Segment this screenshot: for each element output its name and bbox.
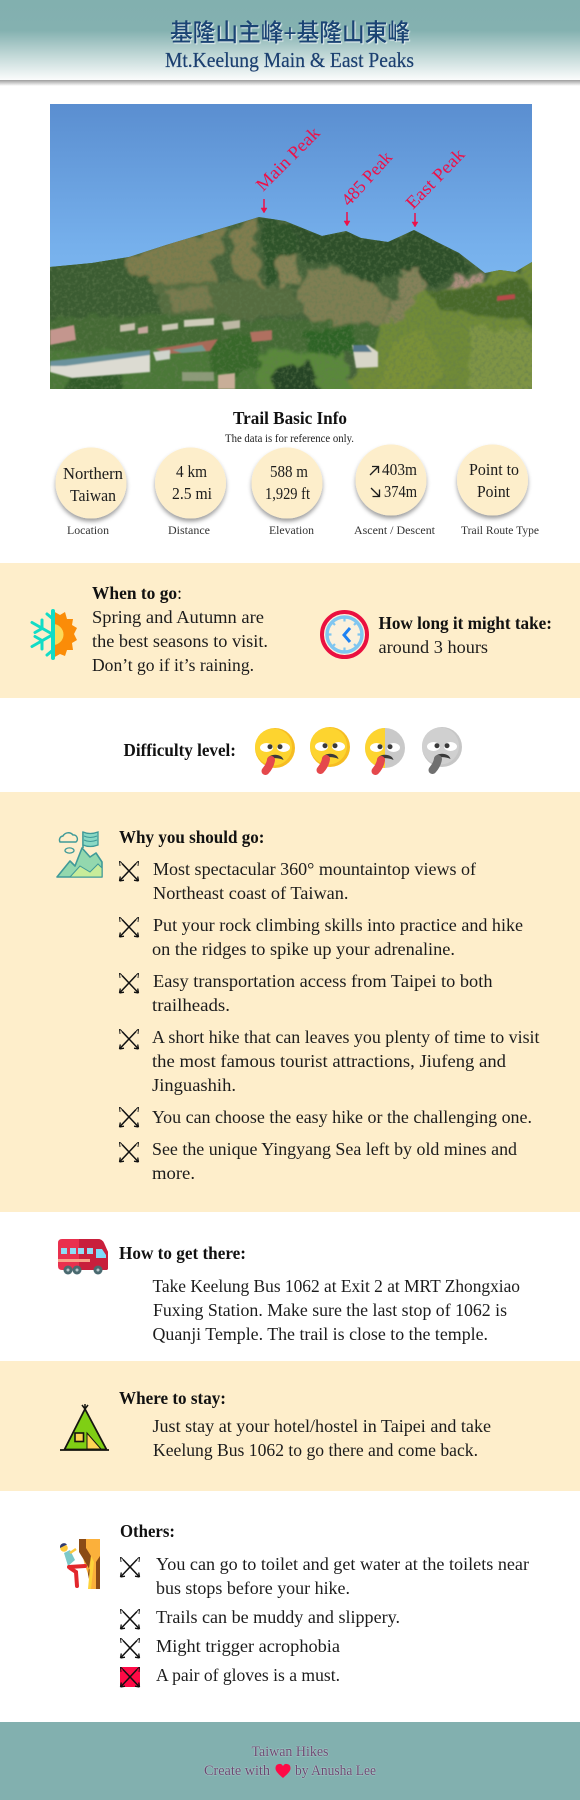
reason: Yingyang Sea: See the unique Yingyang Sea left by old mines and <box>152 1139 517 1159</box>
text: lodging advice: Just stay at your hotel/hostel in Taipei and take <box>152 1416 491 1436</box>
note: toilets <box>120 1554 529 1598</box>
heading: others: Others: <box>120 1521 175 1541</box>
panel: when to go and duration <box>0 563 580 698</box>
stat: location: Taiwan <box>70 486 116 505</box>
text: how long it might take: around 3 hours <box>378 637 488 657</box>
stat: trail route type <box>457 444 539 537</box>
stat: trail route type: Trail Route Type <box>461 523 539 537</box>
stat: elevation <box>252 448 322 537</box>
label: East Peak: East Peak <box>401 144 469 213</box>
reason: Yingyang Sea <box>120 1139 517 1183</box>
icon: face 2 (full) <box>310 727 350 770</box>
reason: Yingyang Sea: more. <box>152 1163 195 1183</box>
title: Chinese: 基隆山主峰+基隆山東峰 <box>170 19 410 47</box>
note: toilets: You can go to toilet and get water at the toilets near <box>156 1554 529 1574</box>
arrows to the peaks <box>261 199 418 227</box>
title: English: Mt.Keelung Main & East Peaks <box>165 48 414 72</box>
heading: why you should go: Why you should go: <box>119 827 264 847</box>
icon: face 1 (full) <box>255 728 295 771</box>
stat: location: Location <box>67 523 109 537</box>
panel: where to stay <box>0 1361 580 1491</box>
text: how long it might take <box>378 613 552 657</box>
stat: ascent and descent: 374m <box>384 482 417 501</box>
heading: how to get there: How to get there: <box>119 1243 246 1263</box>
reason: transportation: trailheads. <box>152 995 230 1015</box>
text: when to go: When to go: <box>92 583 182 603</box>
icon: clock <box>322 612 367 657</box>
note: acrophobia: Might trigger acrophobia <box>156 1636 340 1656</box>
footer: credit: Create with <box>204 1763 271 1779</box>
stat: elevation: Elevation <box>269 523 314 537</box>
stat: ascent and descent: Ascent / Descent <box>354 523 436 537</box>
reason: short hike: the most famous tourist attractions, Jiufeng and <box>152 1051 506 1071</box>
note: toilets: bus stops before your hike. <box>156 1578 350 1598</box>
note: data reference: The data is for reference only. <box>225 431 354 445</box>
text: bus directions <box>152 1276 520 1344</box>
reason: 360 views: Northeast coast of Taiwan. <box>153 883 348 903</box>
photo of the mountain with peak labels <box>40 104 540 395</box>
text: when to go: the best seasons to visit. <box>92 631 268 651</box>
icon: sun and snowflake <box>32 611 77 658</box>
footer: credit: by Anusha Lee <box>295 1763 376 1779</box>
stat: location <box>56 448 126 537</box>
reason: short hike: Jinguashih. <box>152 1075 236 1095</box>
stat: distance: Distance <box>168 523 210 537</box>
label: Main Peak: Main Peak <box>252 123 324 195</box>
stat: ascent and descent: 403m <box>382 460 417 479</box>
label: 485 Peak: 485 Peak <box>337 147 396 210</box>
text: lodging advice: Keelung Bus 1062 to go there and come back. <box>153 1440 478 1460</box>
text: when to go <box>92 583 268 675</box>
reason: transportation <box>120 971 492 1015</box>
icon: bus <box>58 1239 108 1274</box>
reason: transportation: Easy transportation access from Taipei to both <box>153 971 492 991</box>
reason: rock climbing <box>120 915 523 959</box>
footer: credit <box>204 1763 376 1779</box>
text: lodging advice <box>152 1416 491 1460</box>
reason: short hike <box>120 1027 540 1095</box>
icon: mountain with flag <box>57 832 102 877</box>
stat: trail route type: Point to <box>469 460 519 479</box>
section: trail basic info <box>56 408 539 537</box>
section: difficulty level <box>124 727 462 771</box>
heading: where to stay: Where to stay: <box>119 1388 226 1408</box>
footer <box>0 1722 580 1800</box>
note: gloves (highlighted): A pair of gloves is a must. <box>156 1665 340 1685</box>
text: when to go: Don’t go if it’s raining. <box>92 655 254 675</box>
stat: elevation: 1,929 ft <box>265 484 310 503</box>
reason: choice of hikes: You can choose the easy hike or the challenging one. <box>152 1107 532 1127</box>
text: bus directions: Fuxing Station. Make sure the last stop of 1062 is <box>153 1300 507 1320</box>
reason: rock climbing: on the ridges to spike up your adrenaline. <box>152 939 455 959</box>
stat: trail route type: Point <box>477 482 510 501</box>
heading: trail basic info: Trail Basic Info <box>233 408 347 428</box>
panel: why you should go <box>0 792 580 1212</box>
stat: location: Northern <box>63 464 123 483</box>
text: bus directions: Take Keelung Bus 1062 at Exit 2 at MRT Zhongxiao <box>152 1276 520 1296</box>
stat: distance: 4 km <box>176 462 207 481</box>
section: others <box>60 1521 529 1687</box>
icon: rock climber <box>60 1539 100 1589</box>
section: how to get there <box>58 1239 520 1344</box>
icon: tent <box>60 1404 109 1450</box>
text: when to go: Spring and Autumn are <box>92 607 264 627</box>
reason: rock climbing: Put your rock climbing skills into practice and hike <box>153 915 523 935</box>
header banner <box>0 0 580 86</box>
icon: face 3 (half) <box>365 728 405 771</box>
stat: distance <box>155 448 226 537</box>
footer: site name: Taiwan Hikes <box>252 1744 329 1760</box>
note: muddy trails: Trails can be muddy and slippery. <box>156 1607 400 1627</box>
icon: face 4 (empty) <box>422 727 462 770</box>
heading: difficulty level: Difficulty level: <box>124 740 236 760</box>
text: bus directions: Quanji Temple. The trail is close to the temple. <box>152 1324 488 1344</box>
village buildings <box>50 294 515 389</box>
stat: elevation: 588 m <box>270 462 308 481</box>
reason: 360 views: Most spectacular 360° mountaintop views of <box>153 859 476 879</box>
stat: ascent and descent <box>354 444 436 537</box>
text: how long it might take: How long it might take: <box>378 613 552 633</box>
stat: distance: 2.5 mi <box>172 484 212 503</box>
reason: 360 views <box>120 859 476 903</box>
reason: short hike: A short hike that can leaves you plenty of time to visit <box>152 1027 540 1047</box>
